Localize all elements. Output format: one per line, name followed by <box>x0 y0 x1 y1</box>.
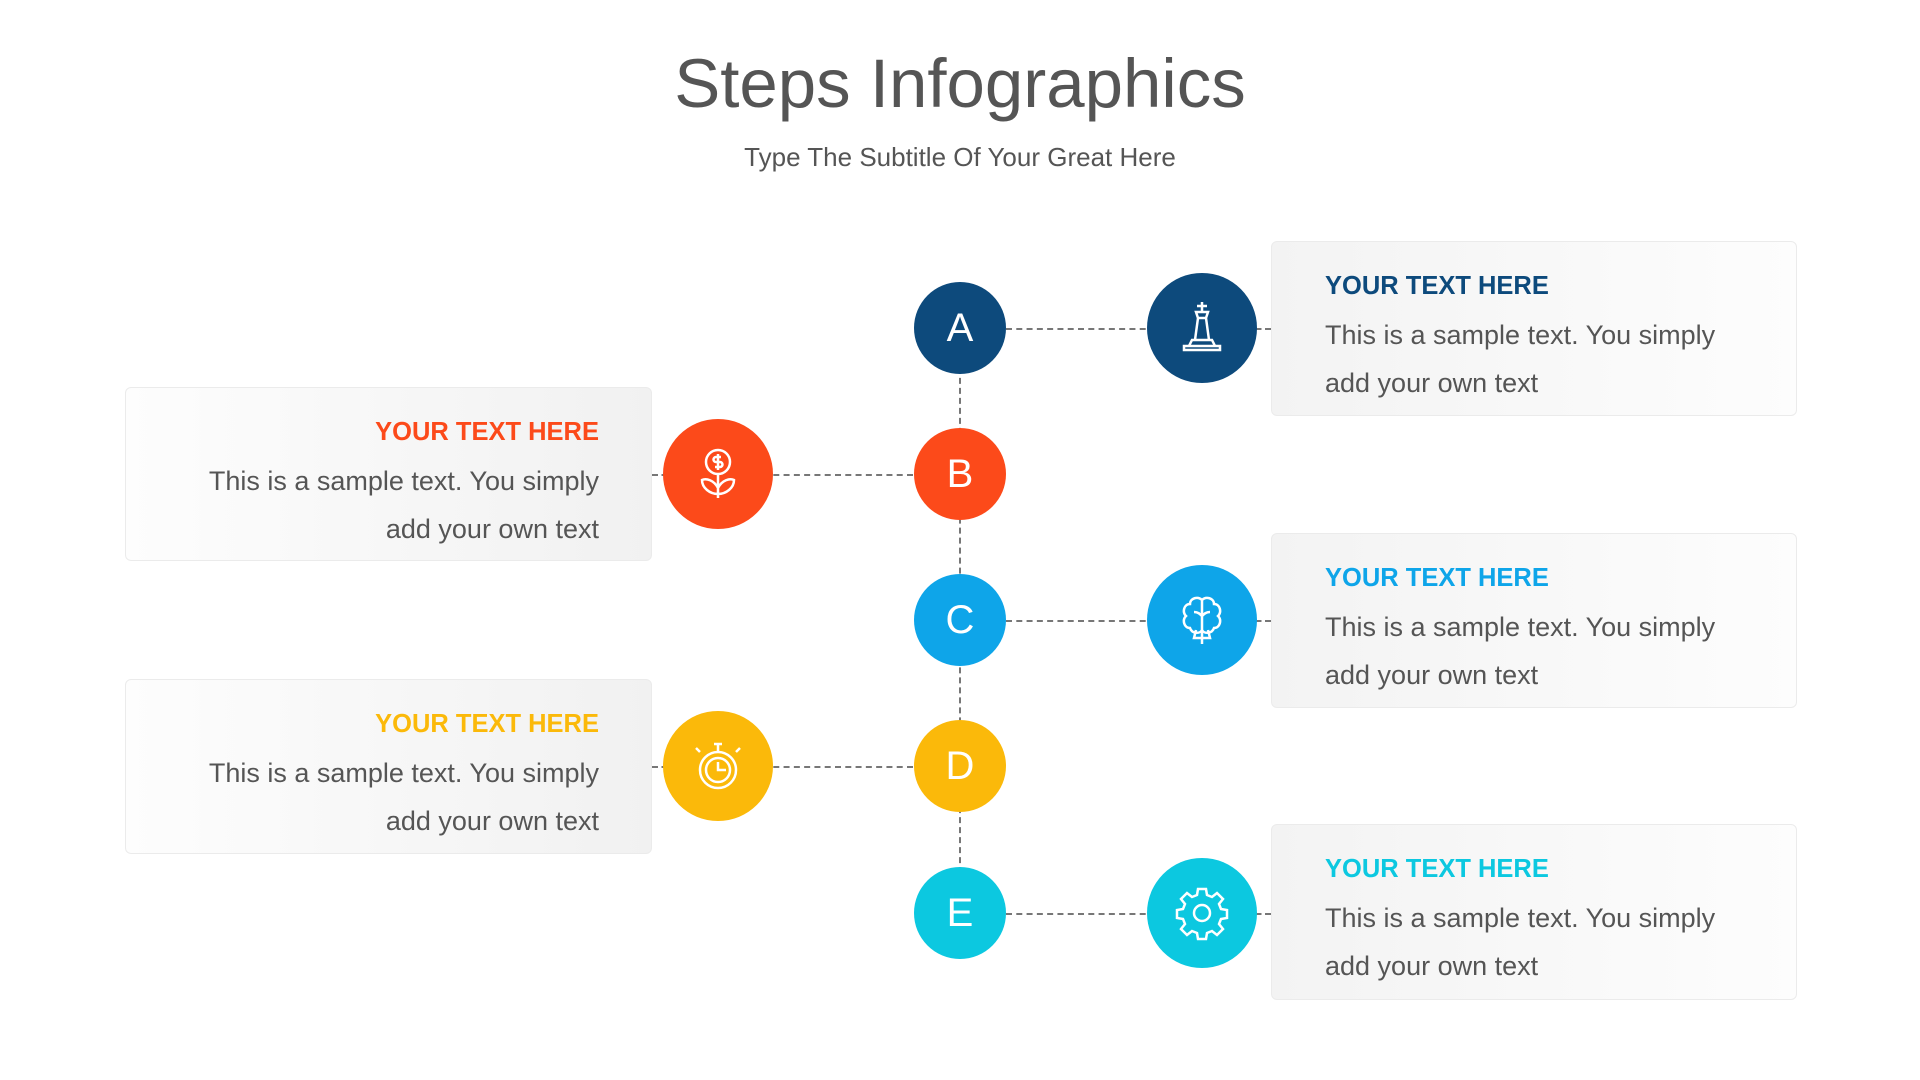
vertical dashed spine <box>959 328 961 913</box>
icon: brain <box>1147 565 1257 675</box>
icon: stopwatch <box>663 711 773 821</box>
step A circle: A <box>947 306 973 350</box>
step E circle: E <box>947 890 973 934</box>
panel E <box>1271 824 1797 1000</box>
panel E: add your own text <box>1325 951 1538 981</box>
panel D: add your own text <box>386 806 599 836</box>
panel A: YOUR TEXT HERE <box>1325 272 1549 300</box>
panel B: This is a sample text. You simply <box>209 466 599 496</box>
step E circle <box>914 867 1006 959</box>
title: Steps Infographics <box>674 45 1246 122</box>
panel C <box>1271 533 1797 708</box>
panel C: add your own text <box>1325 660 1538 690</box>
panel D: YOUR TEXT HERE <box>375 710 599 738</box>
panel E: This is a sample text. You simply <box>1325 903 1715 933</box>
step D circle <box>914 720 1006 812</box>
panel D <box>125 679 652 854</box>
panel C: This is a sample text. You simply <box>1325 612 1715 642</box>
step D circle: D <box>946 744 974 788</box>
icon: chess king <box>1147 273 1257 383</box>
step C circle <box>914 574 1006 666</box>
step B circle: B <box>947 452 973 496</box>
panel E: YOUR TEXT HERE <box>1325 855 1549 883</box>
panel D: This is a sample text. You simply <box>209 758 599 788</box>
icon: gear <box>1147 858 1257 968</box>
panel A: add your own text <box>1325 368 1538 398</box>
panel A: This is a sample text. You simply <box>1325 320 1715 350</box>
subtitle: Type The Subtitle Of Your Great Here <box>744 142 1176 172</box>
icon: money plant <box>663 419 773 529</box>
panel B: add your own text <box>386 514 599 544</box>
step C circle: C <box>946 598 974 642</box>
panel B <box>125 387 652 561</box>
panel C: YOUR TEXT HERE <box>1325 564 1549 592</box>
step A circle <box>914 282 1006 374</box>
panel B: YOUR TEXT HERE <box>375 418 599 446</box>
step B circle <box>914 428 1006 520</box>
panel A <box>1271 241 1797 416</box>
